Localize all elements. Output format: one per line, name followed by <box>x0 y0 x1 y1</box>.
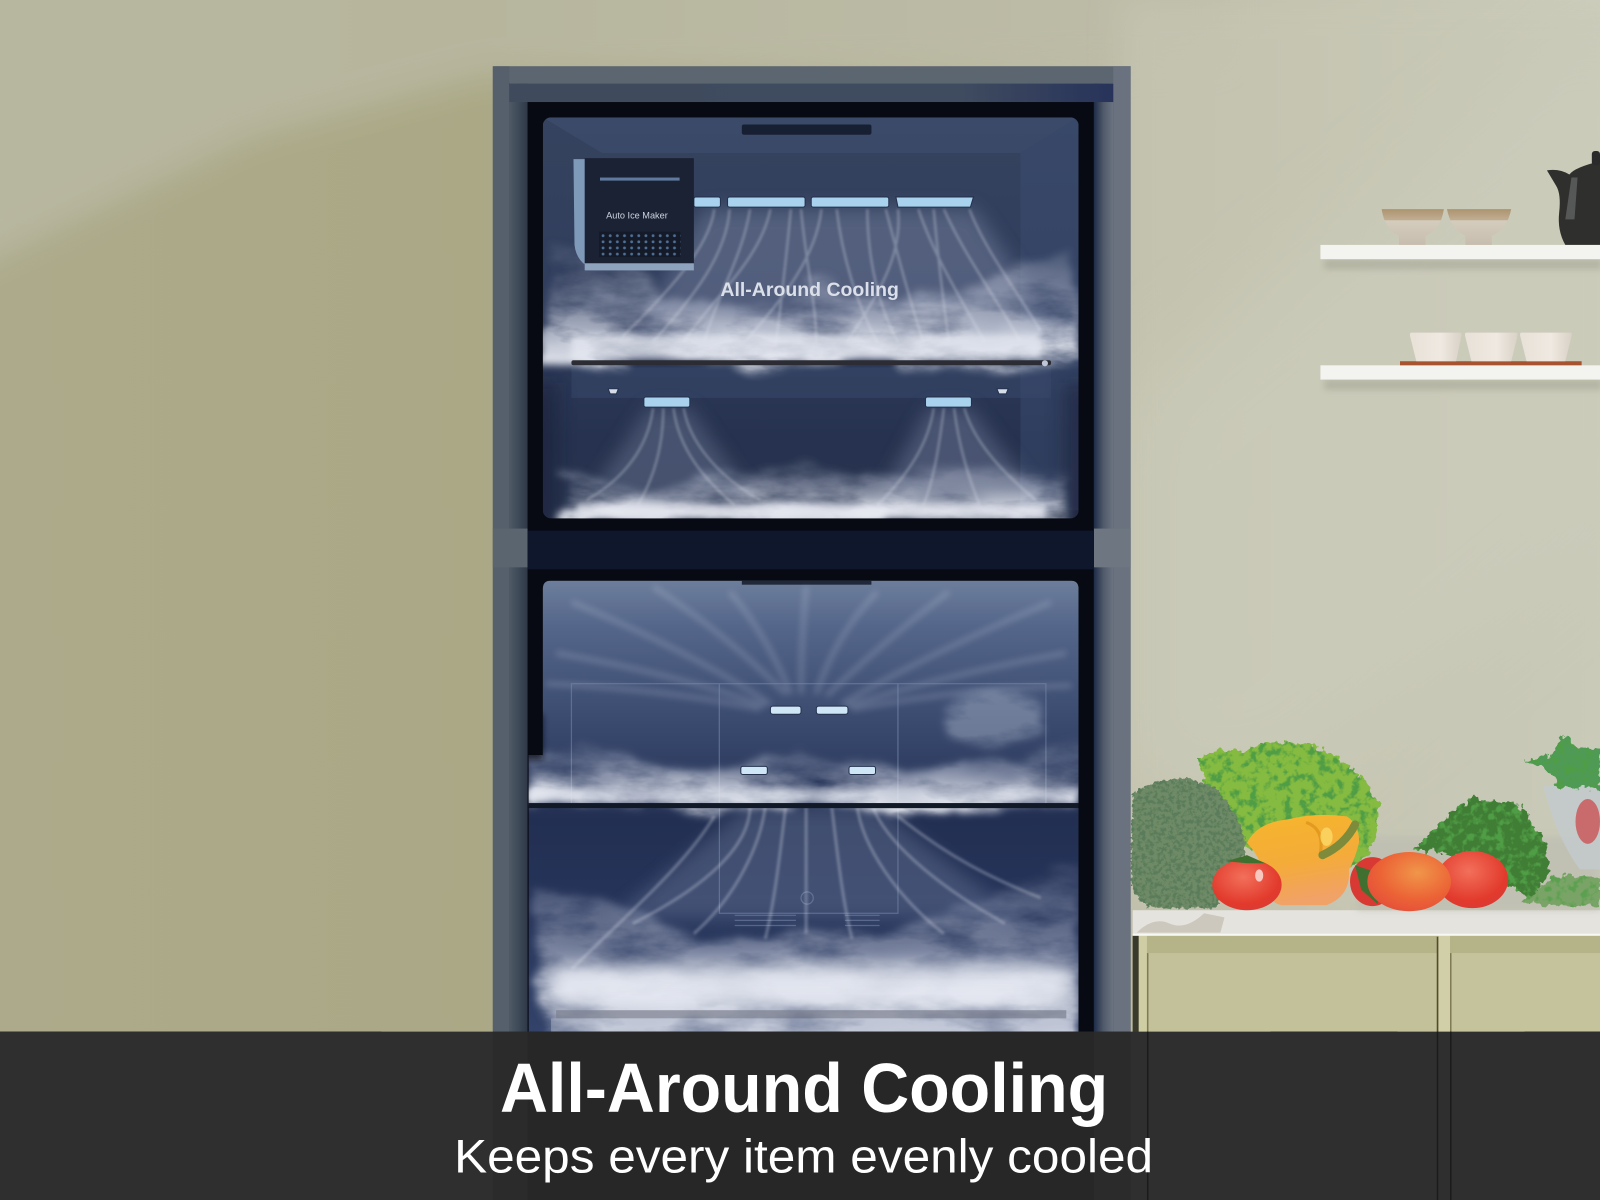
interior perspective walls <box>543 117 1079 510</box>
side vignette lower half of upper compartment <box>533 383 1089 531</box>
banner title: All-Around Cooling <box>500 1049 1108 1127</box>
fog cloud upper shelf <box>546 245 1079 363</box>
kitchen counter and cabinets <box>1133 910 1600 1037</box>
shelf glass upper <box>571 360 1051 366</box>
lower shelf <box>1320 365 1600 390</box>
refrigerator <box>493 66 1131 1046</box>
air haze under vents <box>587 209 1061 500</box>
ice maker dot panel <box>599 232 681 257</box>
banner subtitle: Keeps every item evenly cooled <box>454 1130 1153 1182</box>
air haze below shelf <box>612 808 1020 918</box>
teapot <box>1547 151 1600 245</box>
fog cloud bottom of upper compartment <box>561 454 1061 522</box>
ice maker module <box>573 158 694 270</box>
radial air rays <box>546 587 1071 709</box>
ice maker label: Auto Ice Maker <box>606 210 668 220</box>
cold air stream curves upper shelf <box>622 209 1041 347</box>
green calyx <box>1355 865 1380 904</box>
upper shelf <box>1320 245 1600 269</box>
fog bright floor <box>577 504 1046 518</box>
upper vents row <box>694 197 973 207</box>
fog bright band upper shelf <box>571 335 1041 359</box>
three white cups <box>1410 333 1572 361</box>
top dark slot <box>742 124 871 135</box>
lower compartment <box>522 581 1079 1041</box>
bottom shelf <box>551 1010 1071 1041</box>
parsley <box>1414 798 1600 907</box>
ceramic bowl left <box>1382 209 1444 245</box>
tomato far right <box>1437 851 1508 908</box>
drawer vents <box>741 706 876 774</box>
backsplash ledge haze <box>1357 837 1600 910</box>
drawer shelf bar <box>529 803 1079 808</box>
air stream curves below shelf <box>571 806 1041 969</box>
black door gasket <box>528 102 1094 1046</box>
small tomato behind <box>1350 857 1395 906</box>
tomato centre <box>1367 852 1451 911</box>
wooden tray <box>1400 361 1582 365</box>
lettuce <box>1199 742 1378 867</box>
tomato left <box>1212 855 1282 910</box>
drawer outlines <box>571 684 1046 926</box>
salad bowl <box>1526 737 1600 869</box>
gasket shade over notch <box>522 714 543 760</box>
in-fridge label: All-Around Cooling <box>720 279 899 301</box>
cold air stream curves lower shelf <box>587 408 1036 505</box>
cabinet <box>1133 935 1600 1037</box>
fog bright band drawer shelf <box>529 788 1079 803</box>
lower vents row <box>608 389 1008 407</box>
wall shelves with tableware <box>1320 151 1600 390</box>
caption banner <box>0 1032 1600 1200</box>
door divider band <box>528 531 1094 569</box>
ceramic bowl right <box>1447 209 1511 245</box>
outer frame <box>493 66 1131 1046</box>
fog cloud lower compartment <box>536 867 1079 1041</box>
yellow pepper <box>1247 815 1359 905</box>
upper compartment <box>533 117 1089 531</box>
fog lower bright haze <box>551 964 1071 1010</box>
vegetables <box>1131 737 1600 911</box>
top slot <box>742 581 871 585</box>
broccoli <box>1131 779 1245 908</box>
fog on upper drawer shelf <box>529 689 1079 806</box>
marble countertop <box>1133 910 1600 936</box>
